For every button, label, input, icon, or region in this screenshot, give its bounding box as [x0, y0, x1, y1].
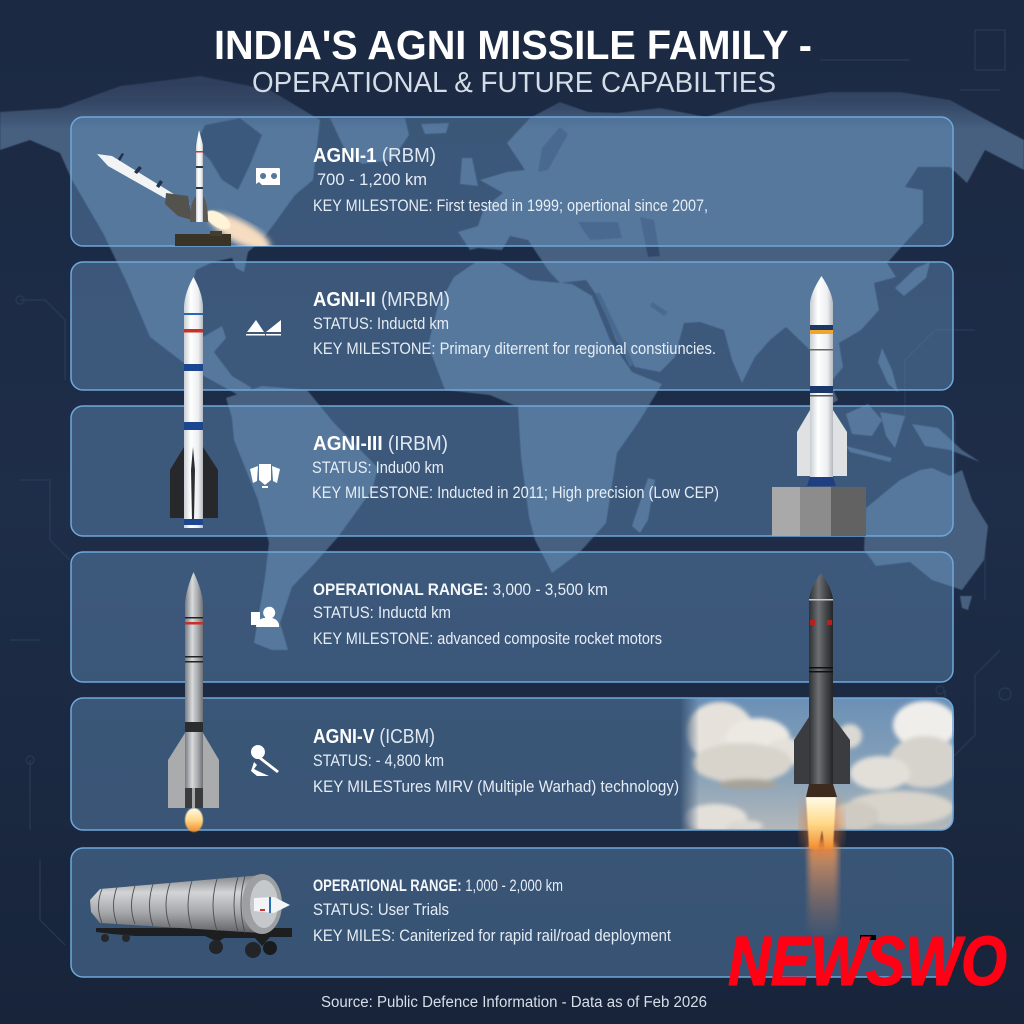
uk	[460, 158, 478, 186]
north america	[0, 76, 320, 396]
text: Agni-V	[313, 726, 679, 796]
text: Agni-1: AGNI-1 (RBM)	[313, 145, 436, 167]
text: Agni-V: AGNI-V (ICBM)	[313, 726, 435, 748]
japan	[895, 262, 930, 296]
exhaust plume	[802, 796, 842, 940]
text: Agni-IV: STATUS: Inductd km	[313, 604, 451, 622]
panel: Agni-II	[71, 262, 953, 390]
borneo and islands	[846, 348, 905, 462]
source note: Source: Public Defence Information - Data as of Feb 2026	[321, 994, 707, 1011]
text: rail canister: KEY MILES: Caniterized for rapid rail/road deployment	[313, 927, 671, 945]
missile launcher: Agni-1	[97, 130, 275, 258]
africa	[428, 262, 662, 573]
australia	[864, 468, 988, 590]
panel: Agni-V	[71, 698, 961, 832]
pedestal	[772, 487, 866, 536]
text: Agni-IV	[313, 581, 662, 648]
illustration: rail canister missile	[90, 874, 292, 958]
text: Agni-1	[313, 145, 708, 215]
text: rail canister: STATUS: User Trials	[313, 901, 449, 919]
dark seas: baltic, black, caspian	[538, 127, 660, 257]
text: Agni-III	[312, 433, 719, 502]
world map	[0, 76, 1024, 650]
rocket: dark launching	[794, 573, 850, 940]
new guinea	[912, 424, 980, 462]
text: rail canister	[313, 877, 671, 945]
text: Agni-II: STATUS: Inductd km	[313, 315, 449, 333]
text: Agni-II: AGNI-II (MRBM)	[313, 289, 450, 311]
hudson bay	[195, 118, 262, 190]
europe and asia	[458, 92, 1024, 405]
panel: Agni-III	[71, 406, 953, 536]
rocket: white and black fins	[170, 277, 218, 528]
rocket on pedestal	[772, 276, 866, 536]
text: Agni-II	[313, 289, 716, 358]
text: Agni-V: STATUS: - 4,800 km	[313, 752, 444, 770]
text: Agni-III: KEY MILESTONE: Inducted in 2011; High precision (Low CEP)	[312, 484, 719, 502]
icon: crest	[250, 464, 280, 488]
text: Agni-1: 700 - 1,200 km	[317, 171, 427, 189]
text: Agni-1: KEY MILESTONE: First tested in 1999; opertional since 2007,	[313, 197, 708, 215]
subtitle: OPERATIONAL & FUTURE CAPABILTIES	[252, 67, 776, 99]
text: Agni-III: STATUS: Indu00 km	[312, 459, 444, 477]
text: Agni-III: AGNI-III (IRBM)	[313, 433, 448, 455]
iceland	[421, 123, 449, 134]
panel: rail canister	[71, 848, 953, 977]
text: Agni-V: KEY MILESTures MIRV (Multiple Warhad) technology)	[313, 778, 679, 796]
tasmania	[960, 596, 972, 610]
text: Agni-II: KEY MILESTONE: Primary diterrent for regional constiuncies.	[313, 340, 716, 358]
icon: operator	[251, 607, 279, 627]
title	[214, 22, 812, 99]
icon: key pin	[251, 745, 279, 776]
rocket: silver	[168, 572, 219, 832]
greenland	[330, 118, 409, 164]
madagascar	[632, 478, 655, 533]
photo: sky and clouds	[680, 698, 961, 832]
icon: launch triangles	[246, 320, 281, 336]
text: Agni-IV: OPERATIONAL RANGE: 3,000 - 3,500 km	[313, 581, 608, 599]
south america	[226, 386, 378, 650]
panel: Agni-1	[71, 117, 953, 258]
panel: operational range 3,000	[71, 552, 953, 682]
icon: command vehicle	[256, 168, 280, 185]
title: INDIA'S AGNI MISSILE FAMILY -	[214, 22, 812, 68]
text: rail canister: OPERATIONAL RANGE: 1,000 - 2,000 km	[313, 877, 563, 895]
text: Agni-IV: KEY MILESTONE: advanced composite rocket motors	[313, 630, 662, 648]
red sea and persian gulf	[595, 293, 668, 367]
